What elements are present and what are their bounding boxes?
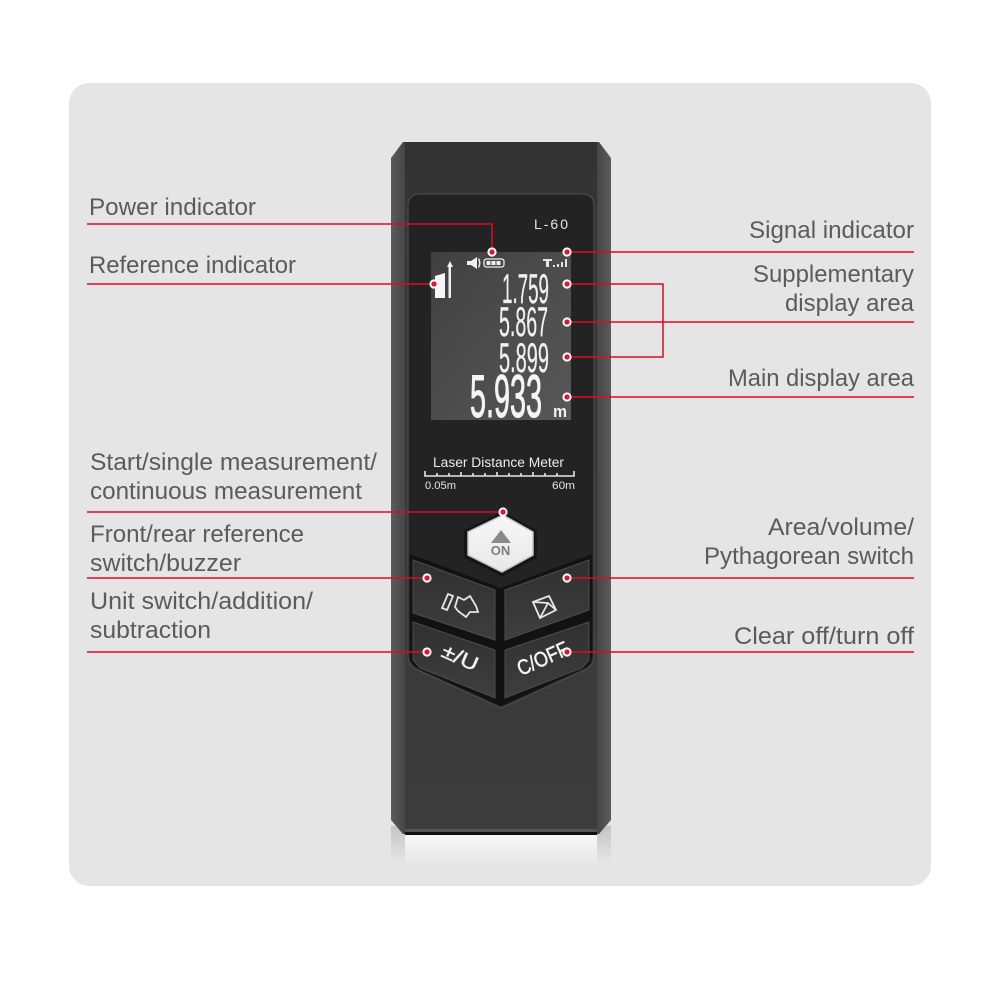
device left side [391, 142, 406, 834]
label: supplementary display area: display area [785, 290, 915, 317]
button: unit switch [413, 622, 495, 698]
model label: L-60 [534, 216, 568, 232]
label: reference indicator: Reference indicator [89, 252, 296, 279]
label: front/rear reference: Front/rear reference [90, 521, 304, 548]
label: clear off: Clear off/turn off [734, 623, 914, 650]
label: start measurement: Start/single measurement/ [90, 449, 377, 476]
icon: signal bars [543, 259, 567, 267]
LCD screen: 1.759 [502, 265, 549, 312]
label: power indicator [87, 194, 496, 256]
label: start measurement [87, 449, 507, 516]
device reflection [391, 826, 611, 867]
label: area/volume: Area/volume/ [768, 514, 914, 541]
button: ON [467, 515, 534, 573]
front bezel [408, 194, 594, 708]
label: unit switch: Unit switch/addition/ [90, 588, 313, 615]
label: area/volume: Pythagorean switch [704, 543, 914, 570]
label: supplementary display area [563, 261, 915, 361]
button: clear/off [505, 622, 589, 698]
icon: battery [484, 259, 504, 267]
range min: 0.05m [425, 480, 456, 492]
label: power indicator: Power indicator [89, 194, 256, 221]
product name: Laser Distance Meter [433, 455, 565, 470]
device bottom edge [405, 829, 597, 835]
icon: reference indicator [435, 273, 445, 298]
label: signal indicator [563, 217, 914, 256]
label: main display area [563, 365, 915, 401]
label: reference indicator [87, 252, 438, 288]
label: clear off [563, 623, 914, 656]
button well [410, 554, 592, 706]
LCD screen: 5.933 [470, 363, 542, 430]
label: supplementary display area: Supplementary [753, 261, 914, 288]
button: unit switch: ±/U [438, 640, 482, 676]
label: main display area: Main display area [728, 365, 915, 392]
device right side [596, 142, 611, 834]
LCD screen [431, 252, 571, 430]
device front face [405, 142, 597, 834]
button: ON: ON [491, 543, 510, 558]
label: front/rear reference: switch/buzzer [90, 550, 241, 577]
label: signal indicator: Signal indicator [749, 217, 914, 244]
label: unit switch: subtraction [90, 617, 211, 644]
ruler scale [425, 471, 574, 476]
LCD screen: 5.867 [499, 298, 548, 345]
unit: m [553, 402, 567, 421]
button: area/volume [505, 560, 589, 640]
label: area/volume [563, 514, 914, 582]
device: laser distance meter [391, 142, 611, 835]
button: clear/off: C/OFF [514, 638, 572, 681]
range max: 60m [552, 480, 575, 492]
label: front/rear reference [87, 521, 431, 582]
label: start measurement: continuous measurement [90, 478, 362, 505]
LCD screen: 5.899 [499, 334, 549, 381]
panel: background [69, 83, 931, 886]
button: reference/buzzer [413, 560, 495, 640]
icon: up arrow [447, 261, 453, 298]
icon: speaker [467, 257, 480, 269]
label: unit switch [87, 588, 431, 656]
